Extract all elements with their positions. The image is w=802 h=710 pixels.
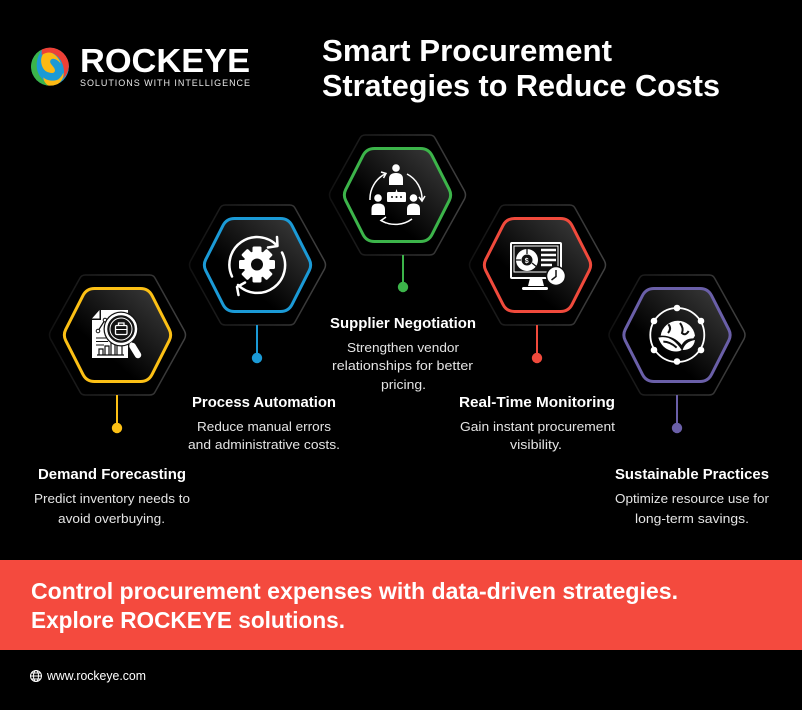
logo: Rockeye bbox=[31, 48, 250, 86]
connector and dot bbox=[112, 395, 122, 433]
label: Strengthen vendor bbox=[347, 341, 459, 355]
icon: monitor dashboard with clock bbox=[511, 243, 566, 290]
label: Gain instant procurement bbox=[460, 420, 616, 434]
label: and administrative costs. bbox=[188, 438, 340, 452]
label: Optimize resource use for bbox=[615, 492, 769, 506]
hexagon frame purple bbox=[609, 275, 745, 395]
step: Sustainable Practices bbox=[609, 275, 769, 526]
icon: globe bbox=[30, 670, 42, 682]
label: Supplier Negotiation bbox=[330, 316, 476, 332]
label bbox=[459, 395, 616, 452]
label: Process Automation bbox=[192, 395, 336, 411]
call to action banner: Control procurement expenses with data-driven strategies. bbox=[31, 578, 678, 604]
label bbox=[615, 467, 769, 526]
title bbox=[322, 33, 720, 103]
label: Demand Forecasting bbox=[38, 467, 186, 483]
website url: www.rockeye.com bbox=[46, 669, 146, 683]
icon: globe with leaves bbox=[650, 305, 704, 365]
icon: monitor dashboard with clock: $ bbox=[525, 258, 529, 265]
label: Real-Time Monitoring bbox=[459, 395, 615, 411]
step: Real-Time Monitoring bbox=[459, 205, 616, 452]
step: Supplier Negotiation bbox=[330, 135, 476, 392]
connector and dot bbox=[532, 325, 542, 363]
hexagon frame yellow bbox=[50, 275, 186, 395]
step: Demand Forecasting bbox=[34, 275, 190, 526]
icon: report with magnifier bbox=[92, 310, 138, 358]
label bbox=[330, 316, 476, 392]
icon: logo swirl bbox=[31, 46, 69, 87]
label: pricing. bbox=[381, 378, 426, 392]
label: visibility. bbox=[510, 438, 562, 452]
icon: negotiation group bbox=[370, 164, 425, 224]
hexagon frame blue bbox=[190, 205, 326, 325]
label: Predict inventory needs to bbox=[34, 492, 190, 506]
call to action banner: Explore ROCKEYE solutions. bbox=[31, 607, 345, 633]
label: Reduce manual errors bbox=[197, 420, 331, 434]
title: Smart Procurement bbox=[322, 33, 612, 68]
label bbox=[188, 395, 340, 452]
tagline: SOLUTIONS WITH INTELLIGENCE bbox=[80, 78, 250, 88]
connector and dot bbox=[672, 395, 682, 433]
label: avoid overbuying. bbox=[58, 512, 165, 526]
call to action banner bbox=[0, 560, 802, 650]
label: Sustainable Practices bbox=[615, 467, 769, 483]
connector and dot bbox=[398, 255, 408, 292]
hexagon frame green bbox=[330, 135, 466, 255]
label: relationships for better bbox=[332, 359, 473, 373]
label: long-term savings. bbox=[635, 512, 749, 526]
wordmark: ROCKEYE bbox=[80, 42, 250, 79]
title: Strategies to Reduce Costs bbox=[322, 68, 720, 103]
hexagon frame red bbox=[470, 205, 606, 325]
step: Process Automation bbox=[188, 205, 340, 452]
icon: gear with cycle arrows bbox=[229, 237, 285, 295]
footer website bbox=[30, 669, 146, 683]
connector and dot bbox=[252, 325, 262, 363]
label bbox=[34, 467, 190, 526]
